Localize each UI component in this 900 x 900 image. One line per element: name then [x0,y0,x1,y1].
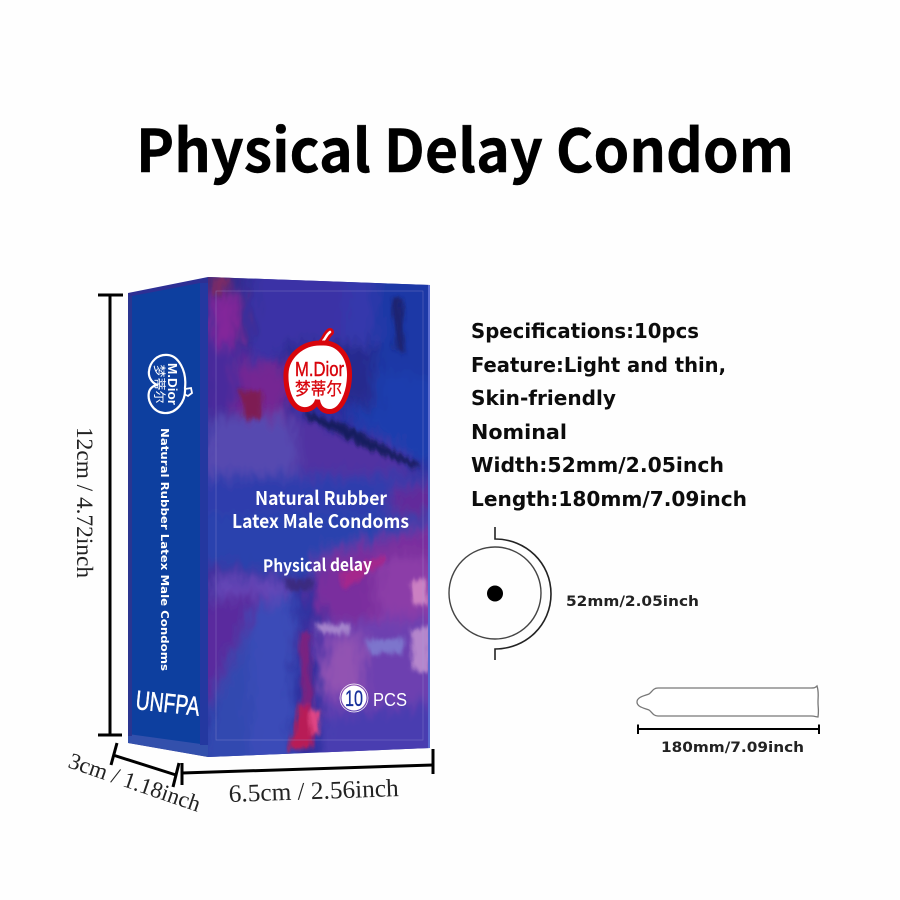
dimension: height: 12cm / 4.72inch [72,427,97,579]
side logo [149,355,192,413]
width label: 52mm/2.05inch [566,594,699,610]
front product name [232,484,409,534]
dimension: depth: 3cm / 1.18inch [65,748,204,817]
box side panel [128,277,208,757]
pack count badge [340,684,407,712]
front logo: red fruit: M.Dior [295,359,344,381]
pack count badge: 10 [345,686,363,711]
side product name: Natural Rubber Latex Male Condoms [158,428,171,671]
specifications text: Skin-friendly [471,386,616,410]
length diagram [637,686,819,756]
front product name: Natural Rubber [255,484,388,511]
front feature label: Physical delay [263,550,372,577]
specifications text [471,319,747,511]
side logo: 梦蒂尔 [151,364,170,404]
dimension: width [182,749,433,808]
front logo: red fruit [286,332,350,412]
product box [128,277,430,757]
side UNFPA mark: UNFPA [134,685,201,722]
box front panel [208,277,430,757]
specifications text: Feature:Light and thin, [471,353,726,377]
front product name: Latex Male Condoms [232,507,409,534]
pack count badge: PCS [373,690,407,710]
specifications text: Specifications:10pcs [471,319,699,343]
title: Physical Delay Condom [136,104,794,189]
side logo: M.Dior [165,363,179,405]
dimension: width: 6.5cm / 2.56inch [228,775,400,808]
specifications text: Length:180mm/7.09inch [471,487,747,511]
length label: 180mm/7.09inch [661,740,804,756]
front logo: red fruit: 梦蒂尔 [295,376,342,401]
specifications text: Nominal [471,420,567,444]
specifications text: Width:52mm/2.05inch [471,453,724,477]
width diagram [449,527,699,660]
